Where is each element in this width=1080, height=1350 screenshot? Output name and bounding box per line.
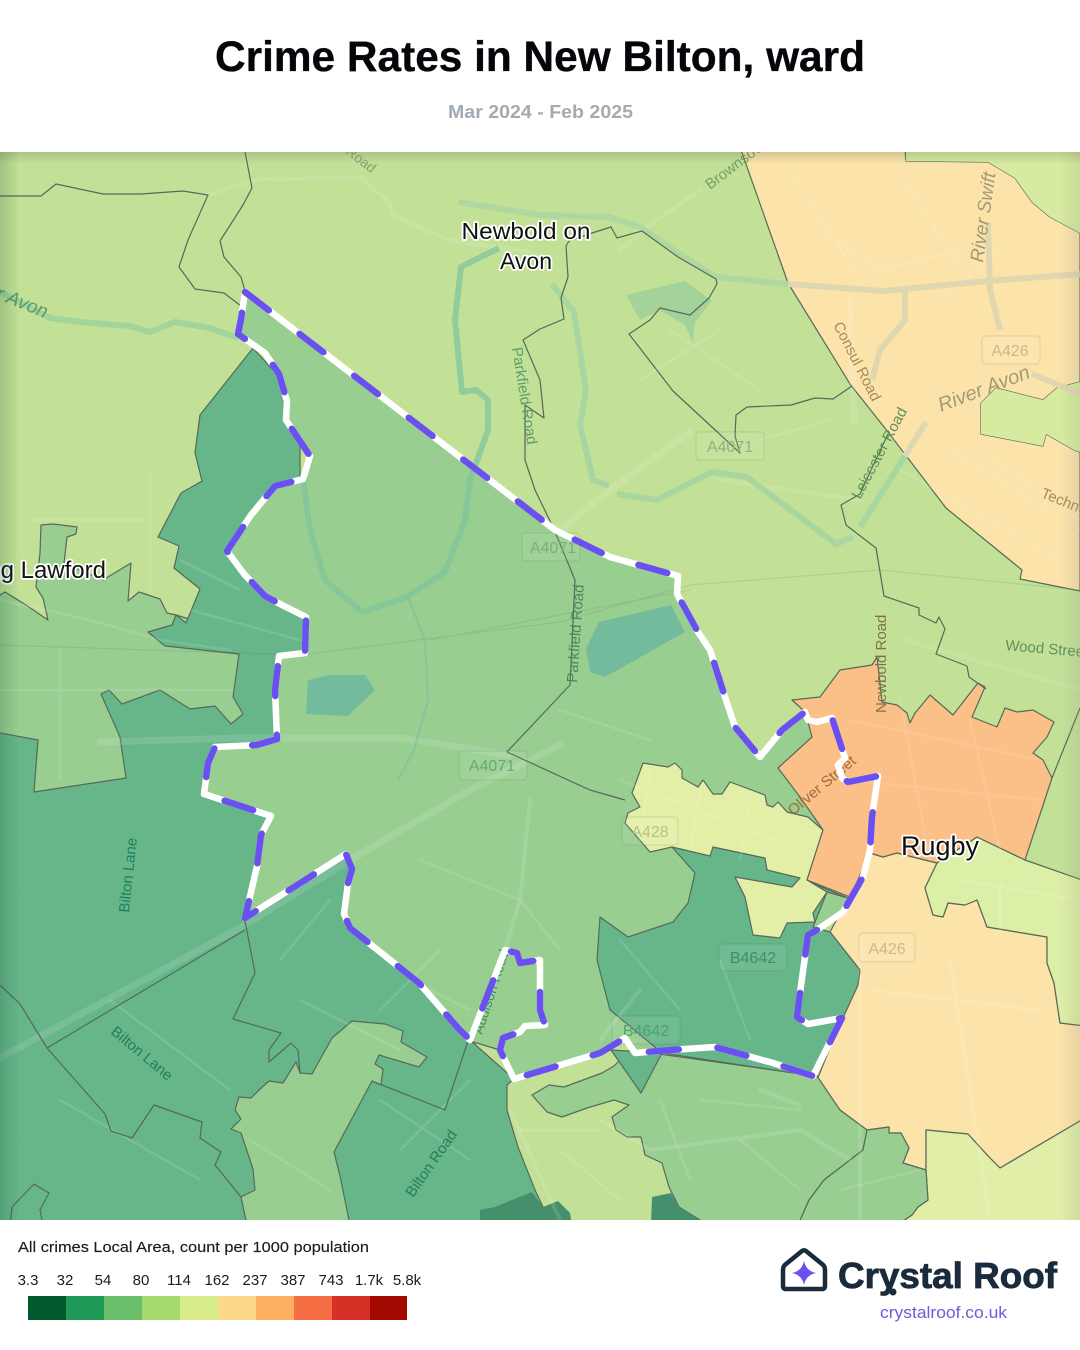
- zone: south-west darker fragments: [480, 1192, 572, 1220]
- shield label: A4071: [530, 540, 576, 557]
- road label: Addison Road: Addison Road: [470, 947, 512, 1036]
- website link: crystalroof.co.uk: [880, 1303, 1008, 1322]
- zone: north-east tan area: [741, 150, 1080, 591]
- legend tick labels: [18, 1272, 422, 1289]
- lake east of Parkfield Road: [586, 605, 685, 677]
- legend tick labels: 80: [133, 1272, 149, 1289]
- road label: Parkfield Road north: Parkfield Road: [508, 346, 540, 446]
- river central: [552, 284, 905, 544]
- zone: Lawford mid green: [0, 523, 242, 792]
- logo key detail: [890, 1288, 896, 1296]
- logo wordmark: Crystal Roof: [838, 1255, 1058, 1296]
- shield label: A4071: [469, 758, 515, 775]
- zone: small triangle dark green: [611, 1050, 662, 1093]
- zone: south-east tan: [817, 853, 1080, 1170]
- zone: Bilton mid green pocket: [231, 1021, 427, 1225]
- zone: A428 pale yellow green: [625, 763, 827, 938]
- legend title: All crimes Local Area, count per 1000 population: [18, 1239, 369, 1256]
- legend tick labels: 54: [95, 1272, 111, 1289]
- zone: east pocket pale green: [981, 382, 1080, 452]
- lake west of ward: [306, 675, 375, 716]
- place label: Rugby: Rugby: [901, 831, 979, 861]
- shield: A426 south: [859, 933, 915, 962]
- shield: A4071 north-east: [696, 432, 764, 460]
- zone: south darker fragment: [651, 1193, 700, 1220]
- river grey section east: [872, 222, 1080, 456]
- legend tick labels: 743: [318, 1272, 344, 1289]
- zone: north-east corner pale green: [906, 150, 1080, 233]
- zone: New Bilton ward mid green fill: [204, 292, 878, 1079]
- road label: Bilton Lane: Bilton Lane: [116, 837, 141, 913]
- zone: inner ward pocket mid green: [473, 954, 540, 1048]
- canal north: [458, 202, 788, 284]
- roads network: [0, 170, 1080, 1220]
- road label: road fragment: Road: [343, 143, 379, 176]
- legend tick labels: 5.8k: [393, 1272, 422, 1289]
- legend: [18, 1239, 422, 1320]
- zone: south-east mid green: [798, 1127, 928, 1225]
- river loop through ward: [303, 248, 499, 612]
- shield label: A4071: [707, 439, 753, 456]
- rail lines: [0, 570, 1080, 655]
- lake north: [626, 281, 712, 343]
- icon: house with star: [783, 1250, 825, 1289]
- zone: south-east pale green: [906, 1120, 1080, 1220]
- road label: Parkfield Road south: Parkfield Road: [564, 584, 588, 683]
- legend tick labels: 114: [167, 1272, 191, 1289]
- road label: Bilton Lane diagonal: Bilton Lane: [107, 1023, 176, 1084]
- legend tick labels: 32: [57, 1272, 73, 1289]
- stream through ward: [398, 597, 428, 780]
- road label: Consul Road: Consul Road: [829, 319, 884, 404]
- ward boundary lines: [0, 152, 1080, 1197]
- shield: B4642 north: [719, 944, 787, 971]
- zone: east pale green: [925, 837, 1080, 1026]
- zone: south mid green: [532, 1050, 867, 1225]
- ward outline: New Bilton: [204, 292, 878, 1079]
- legend tick labels: 3.3: [18, 1272, 38, 1289]
- shield label: B4642: [730, 950, 776, 967]
- shield label: B4642: [623, 1023, 669, 1040]
- road label: River Swift: River Swift: [967, 170, 1001, 264]
- road shields: [459, 336, 1040, 1044]
- road label: Newbold Road: Newbold Road: [873, 615, 890, 713]
- legend tick labels: 387: [280, 1272, 306, 1289]
- zone: small south-west polygon: [10, 1184, 49, 1225]
- legend tick labels: 237: [242, 1272, 268, 1289]
- shield: A4071 centre: [459, 751, 527, 780]
- legend tick labels: 162: [204, 1272, 230, 1289]
- title: Crime Rates in New Bilton, ward: [215, 33, 865, 81]
- place label: Avon: Avon: [500, 248, 552, 274]
- place label: Newbold on: Newbold on: [462, 218, 590, 244]
- zone: west dark green: [0, 348, 545, 1225]
- shield: B4642 south: [612, 1016, 680, 1044]
- zone: Rugby town centre orange: [778, 657, 1054, 897]
- shield: A428: [622, 817, 678, 845]
- shield: A426 north: [982, 336, 1040, 364]
- shield: A4071 north: [522, 533, 580, 561]
- legend colour scale: [28, 1296, 407, 1320]
- road label: Bilton Road: Bilton Road: [402, 1127, 461, 1200]
- road label: Leicester Road: Leicester Road: [849, 405, 911, 502]
- road label: Brownsover: Brownsover: [702, 132, 776, 193]
- shield label: A428: [631, 824, 669, 841]
- zone: B4642 dark green: [597, 847, 860, 1076]
- map edge vignette: [0, 152, 1080, 1220]
- legend tick labels: 1.7k: [355, 1272, 384, 1289]
- shield label: A426: [991, 343, 1029, 360]
- river Avon west: [0, 292, 238, 338]
- shield label: A426: [868, 941, 906, 958]
- road label: River Avon: River Avon: [935, 361, 1033, 417]
- road label: Oliver Street: Oliver Street: [785, 752, 860, 819]
- logo: Crystal Roof: [783, 1250, 1058, 1322]
- canal across tan area: [788, 274, 1080, 291]
- subtitle: date range: Mar 2024 - Feb 2025: [448, 102, 633, 122]
